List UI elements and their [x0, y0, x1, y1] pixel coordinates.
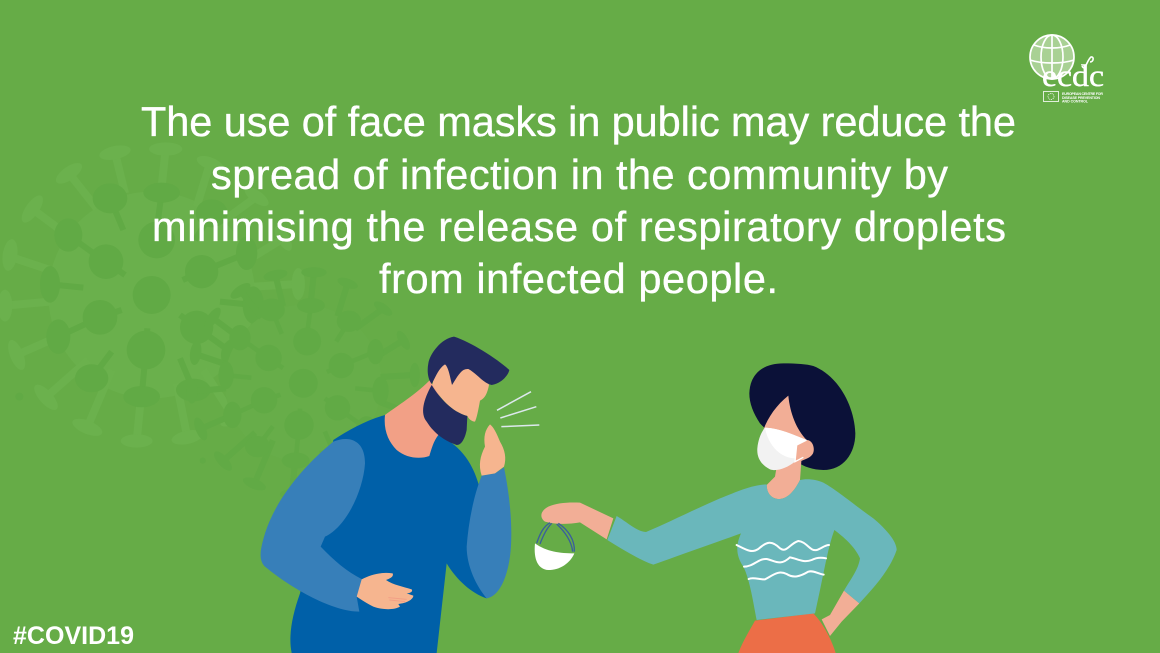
virus illustration: smaller overlapping particle: [186, 267, 420, 499]
held mask: [535, 523, 574, 570]
man raised fist: [480, 424, 505, 476]
title: from infected people.: [379, 255, 778, 302]
cough lines: [497, 392, 539, 427]
logo organisation name: DISEASE PREVENTION: [1062, 96, 1100, 100]
logo: ECDC: [1030, 35, 1104, 104]
man left sleeve: [261, 439, 365, 612]
man beard: [423, 385, 467, 445]
woman ear and cheek: [795, 440, 814, 463]
logo EU flag: [1044, 92, 1058, 102]
woman sweater: [607, 479, 897, 620]
woman lower arm: [822, 591, 859, 636]
man coughing: [261, 337, 539, 653]
sweater waves: [737, 541, 829, 579]
man hair: [428, 337, 509, 385]
logo organisation name: EUROPEAN CENTRE FOR: [1062, 92, 1103, 96]
worn mask: [757, 428, 807, 470]
woman outstretched hand: [541, 502, 613, 539]
hashtag: #COVID19: [13, 622, 134, 650]
woman face: [763, 396, 807, 457]
logo wordmark: ecdc: [1042, 58, 1104, 93]
man face: [433, 360, 489, 422]
woman hair: [749, 363, 855, 470]
title: The use of face masks in public may reduce the: [141, 98, 1016, 145]
title: [141, 98, 1016, 302]
virus illustration: large background particle: [0, 142, 305, 448]
hand detail lines: [388, 598, 407, 602]
man hand on stomach: [357, 573, 413, 609]
logo stem: [1082, 57, 1093, 68]
woman with mask: [535, 363, 897, 653]
woman neck: [767, 457, 802, 499]
man neck: [385, 380, 450, 458]
logo organisation name: AND CONTROL: [1062, 100, 1089, 104]
logo globe: [1030, 35, 1074, 79]
title: spread of infection in the community by: [211, 151, 948, 198]
man torso: [290, 415, 487, 653]
man right sleeve: [467, 467, 511, 598]
woman skirt: [738, 613, 836, 653]
title: minimising the release of respiratory droplets: [152, 203, 1006, 250]
logo organisation name: [1062, 92, 1103, 104]
